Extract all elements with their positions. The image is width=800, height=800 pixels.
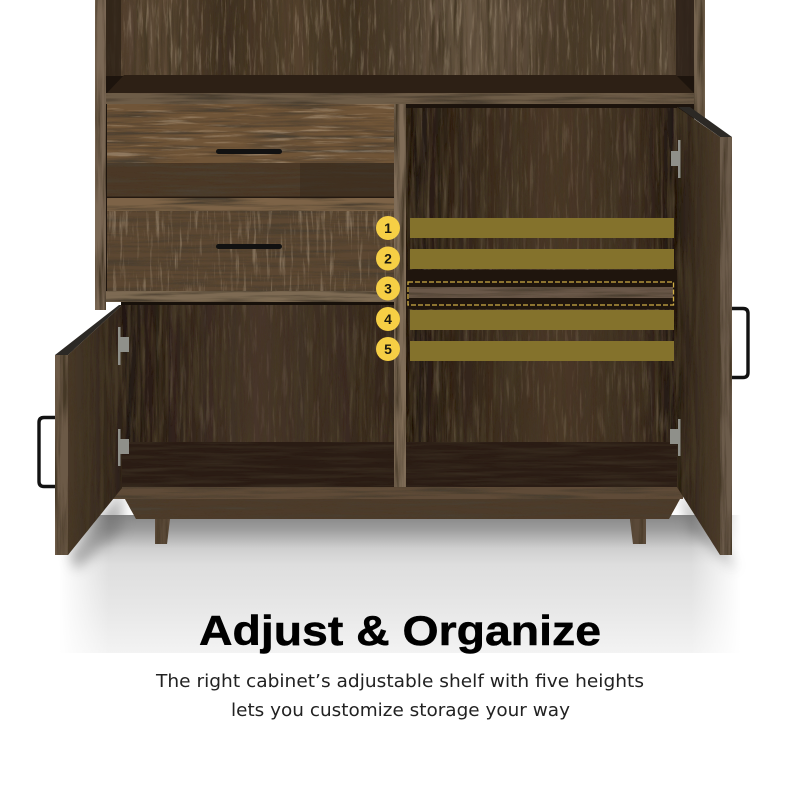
floor shadow [45,490,755,653]
description text [155,672,644,721]
right compartment [406,105,680,487]
hinge bottom [118,429,129,466]
left compartment [121,302,394,487]
badge 4: 4 [384,311,392,327]
badge 5: 5 [384,341,392,357]
description text: The right cabinet’s adjustable shelf with five heights [155,672,644,692]
upper bookcase section [95,0,705,310]
badge 1 [376,216,400,240]
badge 3 [376,276,400,300]
shelf position guides [406,218,678,361]
title: Adjust & Organize [199,607,601,654]
number badges [376,216,400,361]
hinge bottom [670,419,680,456]
description text: lets you customize storage your way [231,701,570,721]
hinge top [671,140,680,178]
cabinet [95,0,705,544]
left door [39,305,129,555]
apron [125,499,680,519]
door side edge [720,137,732,555]
hinge top [118,327,129,365]
badge 5 [376,337,400,361]
door inner face [68,305,122,555]
shelf position 1 [410,218,674,238]
door top edge [678,107,732,137]
badge 3: 3 [384,280,392,296]
cabinet backing [106,0,694,490]
shelf position 2 [410,249,674,269]
badge 2 [376,246,400,270]
shelf position 4 [410,310,674,330]
door side edge [55,355,68,555]
base rail [113,487,683,499]
drawer 1 [107,104,394,198]
right door [670,107,748,555]
door top edge [55,305,122,355]
door inner face [677,107,720,555]
leg right [630,519,646,544]
shelf position 5 [410,341,674,361]
leg left [155,519,170,544]
drawers [106,104,394,302]
drawer bottom rail [106,291,394,302]
dark band behind shelf 3 [406,270,678,309]
shelf position 3, active shelf [408,282,674,305]
badge 1: 1 [384,220,392,236]
door handle [732,308,748,378]
badge 4 [376,307,400,331]
door handle [39,418,55,486]
drawer 2 [107,198,394,291]
badge 2: 2 [384,250,392,266]
centre divider [394,104,406,488]
